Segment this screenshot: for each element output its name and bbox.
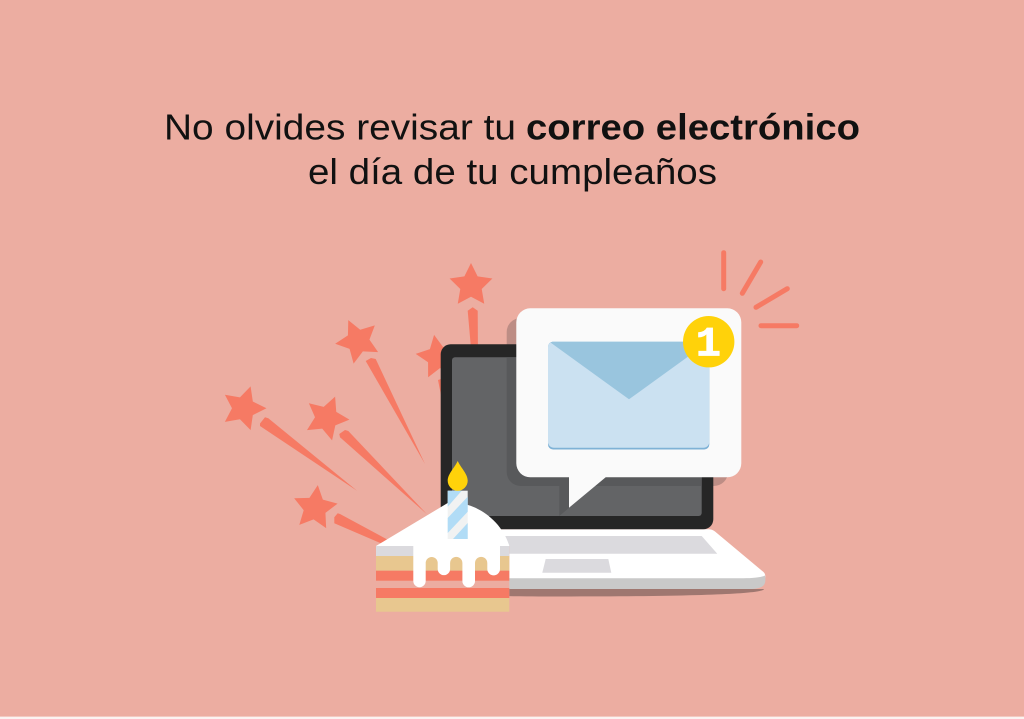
icing drips bbox=[413, 545, 500, 587]
star and trail: lower left bbox=[291, 483, 392, 548]
laptop screen frame bbox=[441, 344, 713, 529]
title line 1: correo electrónico bbox=[526, 106, 860, 148]
star and trail: far left bbox=[217, 380, 357, 491]
keyboard bbox=[480, 536, 717, 554]
cake upper sponge bbox=[376, 556, 509, 571]
speech bubble shadow on background bbox=[507, 318, 728, 486]
candle stripes bbox=[448, 491, 468, 539]
laptop base front edge bbox=[390, 576, 765, 589]
star and trail: upper left bbox=[328, 311, 425, 464]
cake top band bbox=[376, 546, 509, 556]
star and trail: middle left bbox=[299, 388, 427, 514]
badge number: 1 bbox=[696, 320, 721, 368]
fireworks: stars with tapered trails bbox=[217, 263, 492, 548]
trackpad bbox=[542, 559, 611, 573]
laptop base bbox=[390, 529, 765, 581]
speech bubble shadow on screen bbox=[507, 357, 702, 516]
laptop screen bbox=[452, 357, 702, 516]
candle body bbox=[448, 491, 468, 539]
notification rays bbox=[724, 253, 797, 326]
badge bbox=[683, 316, 734, 368]
envelope lip bbox=[548, 342, 709, 450]
cake lower sponge bbox=[376, 598, 509, 612]
speech bubble notification bbox=[516, 308, 741, 508]
cake backing bbox=[376, 546, 509, 612]
star and trail: top bbox=[450, 263, 492, 360]
envelope body bbox=[548, 342, 709, 448]
bubble body bbox=[516, 308, 741, 508]
title bbox=[164, 106, 860, 192]
title line 1: No olvides revisar tu bbox=[164, 106, 516, 148]
icing top bbox=[376, 503, 509, 546]
candle flame bbox=[448, 461, 468, 491]
cake upper jam bbox=[376, 571, 509, 581]
laptop base shadow bbox=[420, 589, 764, 596]
star and trail: behind laptop bbox=[413, 331, 462, 400]
laptop bbox=[390, 344, 765, 596]
title line 2: el día de tu cumpleaños bbox=[308, 151, 717, 192]
envelope flap bbox=[550, 342, 704, 399]
birthday cake slice bbox=[376, 461, 509, 612]
cake lower jam bbox=[376, 588, 509, 598]
envelope bbox=[548, 342, 709, 450]
badge circle bbox=[683, 316, 734, 367]
candle bbox=[448, 461, 468, 539]
